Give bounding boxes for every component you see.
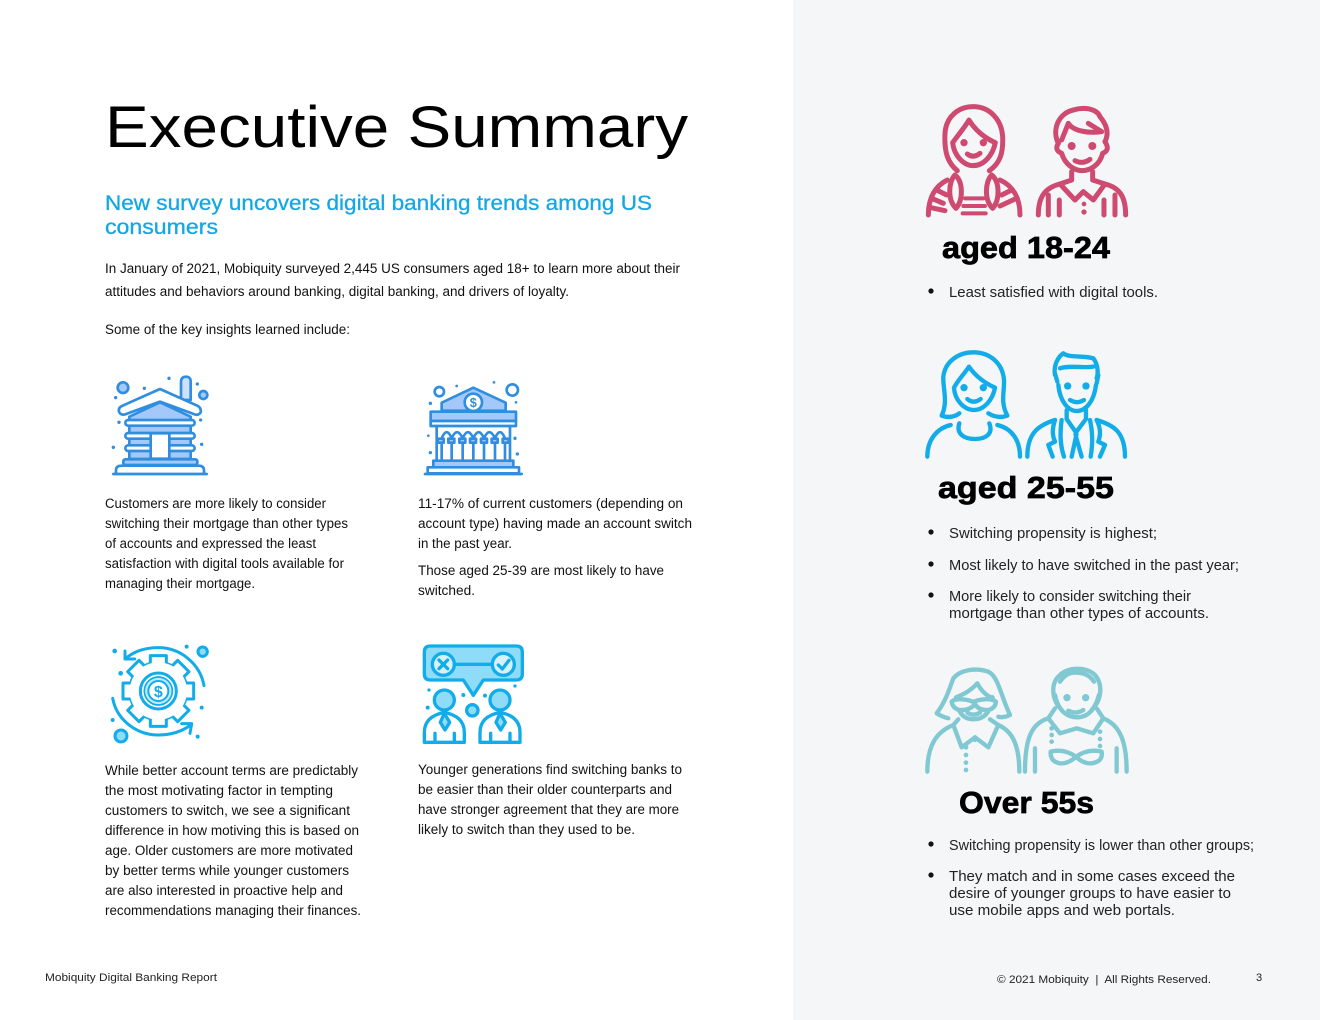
- text block: account switching insight: Those aged 25-39 are most likely to have: [418, 563, 664, 578]
- bullet list: aged 25-55: Most likely to have switched in the past year;: [949, 558, 1239, 574]
- text block: account switching insight: 11-17% of current customers (depending on: [418, 496, 683, 511]
- text block: motivation insight: difference in how motiving this is based on: [105, 823, 359, 838]
- text block: mortgage insight: of accounts and expressed the least: [105, 536, 316, 551]
- text block: introduction: In January of 2021, Mobiquity surveyed 2,445 US consumers aged 18+ to learn more about their: [105, 261, 681, 276]
- bullet list: over 55s: [928, 838, 1254, 919]
- text block: mortgage insight: switching their mortgage than other types: [105, 516, 348, 531]
- text block: motivation insight: the most motivating factor in tempting: [105, 783, 333, 798]
- text block: account switching insight: account type) having made an account switch: [418, 516, 692, 531]
- text block: motivation insight: by better terms while younger customers: [105, 863, 349, 878]
- text block: motivation insight: are also interested in proactive help and: [105, 883, 343, 898]
- subheading: [105, 192, 652, 239]
- bullet list: aged 25-55: [928, 526, 1239, 622]
- text block: account switching insight: [418, 496, 692, 598]
- text block: mortgage insight: Customers are more likely to consider: [105, 496, 326, 511]
- text block: motivation insight: customers to switch, we see a significant: [105, 803, 350, 818]
- bullet list: over 55s: Switching propensity is lower than other groups;: [949, 838, 1254, 854]
- icon: older woman and man: [927, 669, 1127, 772]
- heading: aged 18-24: aged 18-24: [942, 230, 1111, 265]
- panel: right sidebar background: [793, 0, 1320, 1020]
- footer: page number: 3: [1256, 972, 1262, 984]
- icon: young woman and man: [928, 107, 1126, 215]
- text block: younger generations insight: [418, 762, 682, 837]
- text block: mortgage insight: [105, 496, 348, 591]
- icon: gear with dollar: $: [154, 684, 163, 701]
- bullet list: aged 25-55: Switching propensity is highest;: [949, 526, 1157, 542]
- text block: motivation insight: recommendations managing their finances.: [105, 903, 361, 918]
- bullet list: over 55s: desire of younger groups to have easier to: [949, 886, 1231, 902]
- subheading: consumers: [105, 216, 218, 239]
- text block: motivation insight: While better account terms are predictably: [105, 763, 358, 778]
- text block: younger generations insight: have stronger agreement that they are more: [418, 802, 679, 817]
- subheading: New survey uncovers digital banking trends among US: [105, 192, 652, 215]
- bullet list: over 55s: They match and in some cases exceed the: [949, 869, 1235, 885]
- title: Executive Summary: [105, 95, 688, 160]
- bullet list: aged 18-24: Least satisfied with digital tools.: [949, 285, 1158, 301]
- heading: over 55s: Over 55s: [959, 785, 1094, 820]
- text block: motivation insight: age. Older customers are more motivated: [105, 843, 353, 858]
- text block: introduction: attitudes and behaviors around banking, digital banking, and drivers of loyalty.: [105, 284, 569, 299]
- text block: younger generations insight: Younger generations find switching banks to: [418, 762, 682, 777]
- icon: two people comparing choices: [424, 646, 522, 742]
- heading: aged 25-55: aged 25-55: [938, 470, 1114, 505]
- text block: introduction: Some of the key insights learned include:: [105, 322, 350, 337]
- text block: mortgage insight: satisfaction with digital tools available for: [105, 556, 344, 571]
- icon: bank building: $: [470, 396, 477, 410]
- icon: log cabin: [112, 377, 207, 474]
- bullet list: aged 25-55: More likely to consider switching their: [949, 589, 1191, 605]
- icon: adult woman and man: [927, 352, 1125, 457]
- icon: bank building: [425, 381, 522, 474]
- text block: younger generations insight: be easier than their older counterparts and: [418, 782, 672, 797]
- bullet list: aged 25-55: mortgage than other types of accounts.: [949, 606, 1209, 622]
- text block: motivation insight: [105, 763, 361, 918]
- text block: introduction: [105, 261, 681, 337]
- text block: mortgage insight: managing their mortgage.: [105, 576, 255, 591]
- text block: account switching insight: switched.: [418, 583, 475, 598]
- footer: copyright: © 2021 Mobiquity | All Rights Reserved.: [997, 974, 1211, 986]
- footer: report name: Mobiquity Digital Banking Report: [45, 972, 217, 984]
- bullet list: over 55s: use mobile apps and web portals.: [949, 903, 1175, 919]
- icon: gear with dollar: [111, 645, 207, 742]
- text block: younger generations insight: likely to switch than they used to be.: [418, 822, 635, 837]
- text block: account switching insight: in the past year.: [418, 536, 512, 551]
